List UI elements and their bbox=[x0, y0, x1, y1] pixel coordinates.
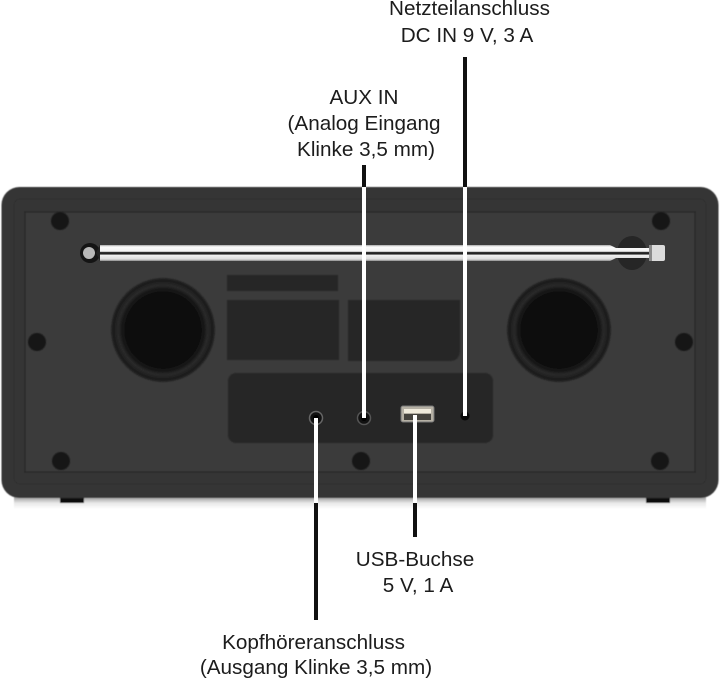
label: Kopfhöreranschluss: (Ausgang Klinke 3,5 mm) bbox=[200, 656, 432, 679]
aux jack bbox=[358, 412, 370, 424]
left speaker port bbox=[111, 278, 215, 382]
label: USB-Buchse: 5 V, 1 A bbox=[383, 574, 453, 597]
line: AUX IN bbox=[362, 165, 366, 418]
label: AUX IN: (Analog Eingang bbox=[288, 112, 440, 135]
label recesses bbox=[227, 275, 460, 361]
label: Netzteilanschluss: DC IN 9 V, 3 A bbox=[401, 24, 534, 47]
label: AUX IN: AUX IN bbox=[330, 86, 398, 109]
dc socket bbox=[460, 412, 470, 420]
line: Netzteilanschluss bbox=[463, 57, 467, 416]
port panel bbox=[228, 373, 493, 443]
antenna bbox=[80, 236, 665, 270]
label: AUX IN: Klinke 3,5 mm) bbox=[297, 138, 435, 161]
line: USB-Buchse bbox=[413, 415, 417, 537]
headphone jack bbox=[310, 412, 322, 424]
usb socket bbox=[401, 406, 434, 422]
line: Kopfhöreranschluss bbox=[314, 418, 318, 620]
radio body bbox=[2, 187, 718, 509]
screws bbox=[28, 212, 693, 470]
right speaker port bbox=[507, 278, 611, 382]
label: Kopfhöreranschluss: Kopfhöreranschluss bbox=[222, 631, 405, 654]
label: USB-Buchse: USB-Buchse bbox=[356, 548, 474, 571]
